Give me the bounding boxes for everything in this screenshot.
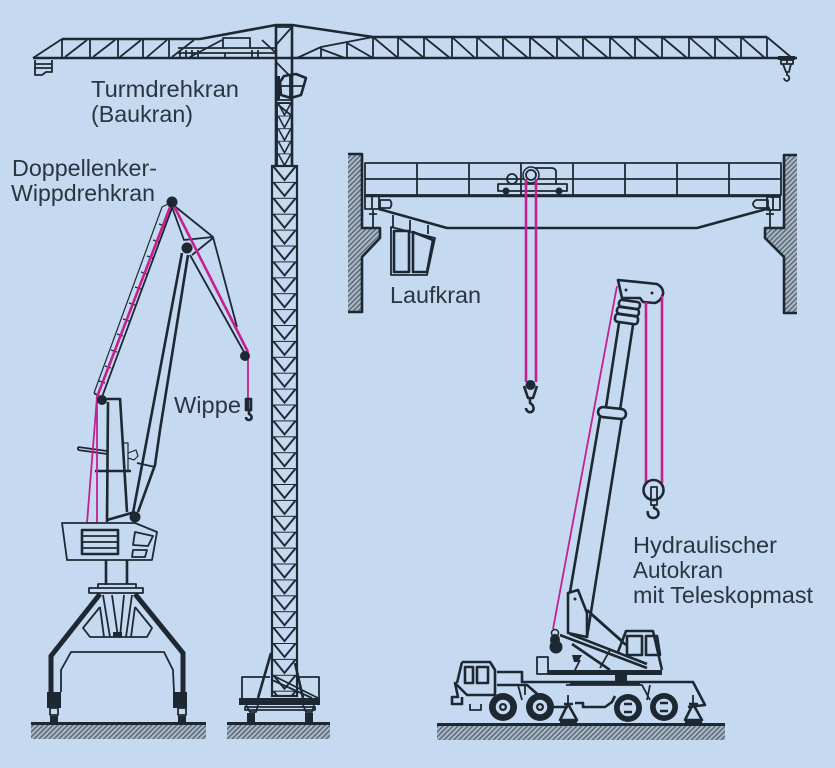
left runway wall [348, 154, 380, 312]
label: mit Teleskopmast: mit Teleskopmast [633, 582, 814, 608]
trolley [498, 167, 567, 194]
label: Wippdrehkran: Wippdrehkran [11, 180, 155, 206]
ground: tower crane [227, 722, 330, 739]
label: Hydraulischer: Hydraulischer [633, 532, 777, 558]
luffing hook [246, 399, 252, 420]
ground: mobile crane [437, 723, 725, 740]
upper tower section [277, 103, 292, 166]
slewing column [78, 398, 138, 522]
label: Wippe: Wippe [174, 392, 241, 418]
linkage and mast [133, 204, 244, 513]
tower base [239, 653, 320, 722]
outriggers [560, 695, 702, 723]
telescopic boom head [618, 280, 663, 303]
truck cab [452, 662, 495, 710]
overhead crane [348, 154, 797, 412]
truck chassis [497, 672, 705, 707]
title label: tower crane: Turmdrehkran [91, 76, 239, 102]
machinery house [62, 523, 157, 560]
boom collars [615, 299, 640, 325]
upper carriage cab [537, 631, 662, 681]
luffing boom ladder [94, 203, 172, 397]
boom foot and luffing cylinder [550, 590, 647, 670]
operator cab [277, 74, 306, 100]
jib hook [778, 56, 795, 81]
end carriages [365, 195, 780, 228]
telescopic boom [570, 323, 633, 637]
mobile crane [452, 280, 705, 723]
hook block [644, 480, 664, 518]
portal column [89, 560, 143, 593]
right runway wall [765, 155, 797, 313]
bridge girder [365, 163, 781, 196]
label: Autokran: Autokran [633, 557, 723, 583]
pivots [97, 196, 250, 522]
overhead hook [524, 380, 537, 412]
tower head [276, 25, 292, 166]
bridge lower chord [379, 208, 770, 228]
main tower [272, 166, 297, 696]
counterweight [34, 60, 52, 75]
ground: left crane [31, 722, 206, 739]
label: Doppellenker: Doppellenker- [12, 155, 157, 181]
wheels [489, 693, 678, 722]
portal legs [51, 594, 183, 693]
hoist ropes [526, 179, 536, 382]
crane cab [391, 215, 435, 275]
portal feet [47, 692, 187, 723]
tower crane jib [33, 25, 797, 58]
level-luffing crane [47, 196, 252, 723]
ropes [87, 202, 248, 523]
label: Laufkran: Laufkran [390, 282, 481, 308]
label: Baukran: (Baukran) [91, 101, 193, 127]
boom ropes [553, 286, 662, 629]
